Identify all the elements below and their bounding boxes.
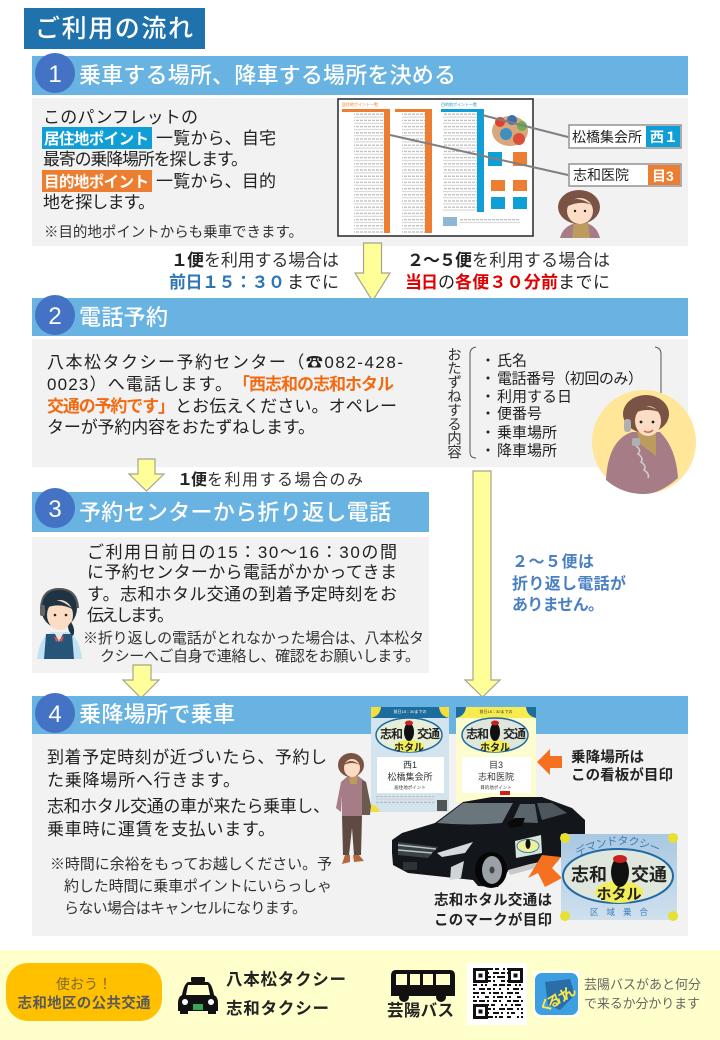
taxi company names: 志和タクシー (226, 999, 329, 1018)
step 4 header bar: 乗降場所で乗車 (79, 702, 235, 727)
step 2 text: ターが予約内容をおたずねします。 (47, 418, 315, 437)
step 1 header bar (32, 53, 688, 95)
bracket (470, 347, 661, 458)
QR code (467, 963, 527, 1025)
label: 松橋集会所 西1: 松橋集会所 (572, 129, 642, 145)
Hotaru Kotsu mark: 志和 (571, 865, 607, 885)
badge: public transport: 使おう！ (56, 976, 112, 992)
label: 志和医院 目3: 志和医院 (573, 167, 629, 183)
badge: public transport (6, 963, 162, 1021)
step 1 text: 一覧から、目的 (156, 172, 276, 191)
step 2 text: 0023）へ電話します。 (47, 375, 232, 394)
sign: 西1: 前日15：30までの (394, 708, 426, 714)
step 1 text (42, 108, 303, 241)
icon: Kuruken app: くるけん (536, 982, 579, 1016)
step 1 text: ※目的地ポイントからも乗車できます。 (44, 224, 303, 241)
Hotaru Kotsu mark: デマンドタクシー (576, 836, 660, 856)
step 1 header bar: 1 (48, 61, 62, 88)
icon: woman on phone (592, 390, 696, 494)
taxi car photo (392, 791, 585, 888)
leader lines (390, 115, 568, 175)
sign: 西1: 交通 (417, 726, 440, 741)
text: 2-5便 condition: の (438, 273, 455, 292)
step 4 text: た乗降場所へ行きます。 (47, 771, 240, 790)
icon: taxi (178, 977, 218, 1014)
step 3 text: に予約センターから電話がかかってきま (87, 563, 397, 582)
text: mark caption: 志和ホタル交通は (434, 891, 552, 909)
sign: 西1 (371, 707, 449, 812)
step 4 text: 志和ホタル交通の車が来たら乗車し、 (47, 797, 330, 816)
sign: 目3: 交通 (503, 726, 526, 741)
text: no callback note: ２～５便は (512, 553, 594, 571)
label: 志和医院 目3: 目3 (652, 168, 674, 184)
bus label: 芸陽バス (387, 1000, 454, 1020)
step 4 header bar (32, 693, 688, 734)
step 2 header bar: 電話予約 (79, 305, 168, 330)
text: no callback note: 折り返し電話が (512, 574, 626, 593)
title: ご利用の流れ (35, 15, 193, 43)
step 1 text: このパンフレットの (43, 108, 198, 127)
arrow: to car mark (528, 855, 562, 887)
text: sign caption: 乗降場所は (571, 749, 644, 766)
sign: 目3: 目的地ポイント (480, 784, 512, 791)
step 2 header bar: 2 (48, 303, 62, 330)
text: no callback note: ありません。 (512, 596, 604, 614)
sign: 西1: 居住地ポイント (394, 784, 426, 791)
step 4 note: らない場合はキャンセルになります。 (64, 900, 307, 917)
Hotaru Kotsu mark: 区 域 乗 合 (590, 907, 648, 917)
label: 松橋集会所 西1: 西１ (650, 129, 678, 145)
text: sign caption (571, 749, 673, 784)
pamphlet thumbnail (338, 99, 533, 236)
asked items list: 乗車場所 (497, 424, 557, 442)
arrow: step 2 to 3 (129, 459, 164, 491)
taxi company names: 八本松タクシー (226, 970, 346, 989)
sign: 西1: 松橋集会所 (387, 771, 433, 782)
icon: operator (37, 588, 82, 659)
step 2 text: 「西志和の志和ホタル (233, 375, 394, 394)
panel: footer (0, 950, 720, 1040)
step 3 header bar: 3 (48, 496, 62, 523)
step 3 header bar: 予約センターから折り返し電話 (79, 500, 391, 525)
icon: woman (558, 190, 600, 238)
step 3 note (83, 630, 424, 665)
step 2 text: とお伝えください。オペレー (175, 397, 397, 416)
text: 2-5便 condition (405, 251, 610, 292)
step 2 header bar (32, 295, 688, 336)
text: 2-5便 condition: を利用する場合は (472, 251, 610, 270)
step 3 text: 伝えします。 (87, 606, 174, 625)
step 1 text: 目的地ポイント (44, 173, 149, 191)
step 3 note: ※折り返しの電話がとれなかった場合は、八本松タ (83, 630, 424, 647)
text: 2-5便 condition: 各便３０分前 (455, 272, 558, 292)
sign: 目3: 志和医院 (478, 771, 514, 782)
text: 2-5便 condition: 当日 (405, 273, 438, 292)
icon: Kuruken app (534, 971, 579, 1017)
sign: 目3: 目3 (489, 760, 503, 770)
sign: 目3: ホタル (480, 742, 510, 754)
sign: 西1: ホタル (394, 742, 424, 754)
step 1 text: 一覧から、自宅 (156, 129, 276, 148)
text: 2-5便 condition: ２～５便 (407, 251, 472, 270)
arrow: step 3 to 4 (123, 665, 159, 698)
icon: standing woman (336, 753, 371, 864)
label: 松橋集会所 西1 (569, 125, 681, 148)
text: 1便 condition: までに (287, 273, 339, 292)
text: 2-5便 condition: までに (558, 273, 610, 292)
sign: 目3: 前日15：30までの (480, 708, 512, 714)
sign: 西1: 西1 (403, 760, 417, 770)
step 4 body background (32, 734, 688, 936)
step 3 text: ご利用日前日の15：30～16：30の間 (87, 543, 397, 562)
step 3 header bar (32, 488, 429, 532)
text: sign caption: この看板が目印 (571, 766, 673, 784)
step 2 text (47, 353, 403, 437)
panel: step 4 (32, 693, 688, 936)
step 4 text (47, 748, 330, 839)
text: Kuruken description: 芸陽バスがあと何分 (584, 977, 701, 992)
text: mark caption: このマークが目印 (434, 911, 552, 929)
step 1 header bar: 乗車する場所、降車する場所を決める (79, 63, 456, 88)
text: no callback note (512, 553, 626, 614)
sign: 目3 (456, 707, 536, 803)
step 4 header bar: 4 (48, 701, 62, 728)
step 4 text: 乗車時に運賃を支払います。 (47, 820, 275, 839)
step 3 note: クシーへご自身で連絡し、確認をお願いします。 (100, 648, 420, 665)
text: 1便 condition: １便 (171, 251, 204, 270)
step 2 text: 交通の予約です」 (47, 397, 175, 416)
arrow: to signs (537, 749, 562, 775)
step 1 text: 居住地ポイント (44, 129, 149, 148)
text: 1便 condition: 前日１５：３０ (169, 273, 285, 292)
text: Kuruken description (584, 977, 701, 1011)
text: 1便 only: を利用する場合のみ (207, 471, 363, 489)
icon: bus (391, 970, 455, 1002)
step 4 note (50, 856, 332, 917)
step 4 note: 約した時間に乗車ポイントにいらっしゃ (64, 878, 332, 895)
panel: step 3 (32, 488, 429, 673)
step 4 text: 到着予定時刻が近づいたら、予約し (47, 748, 327, 767)
panel: step 2 (32, 295, 688, 467)
text: 1便 condition: を利用する場合は (204, 251, 339, 270)
text: Kuruken description: で来るか分かります (584, 996, 700, 1011)
pamphlet thumbnail: 目的地ポイント一覧 (441, 101, 477, 107)
arrow: step 1 to 2 (355, 243, 390, 301)
sign: 西1: 志和 (380, 726, 403, 741)
step 3 text: す。志和ホタル交通の到着予定時刻をお (87, 585, 397, 604)
asked items list: 電話番号（初回のみ） (497, 370, 643, 388)
asked items list (486, 352, 643, 460)
taxi company names (226, 970, 346, 1018)
step 1 text: 地を探します。 (43, 193, 155, 212)
Hotaru Kotsu mark (560, 833, 678, 921)
Hotaru Kotsu mark: 交通 (631, 865, 667, 885)
step 4 note: ※時間に余裕をもってお越しください。予 (50, 856, 332, 873)
asked items list: 降車場所 (497, 442, 557, 460)
asked items list: 氏名 (497, 352, 527, 370)
asked items list: 便番号 (497, 406, 542, 422)
panel: step 1 (32, 53, 688, 246)
badge: public transport: 志和地区の公共交通 (18, 994, 151, 1012)
step 1 text: 最寄の乗降場所を探します。 (43, 150, 248, 169)
step 3 text (87, 543, 397, 625)
pamphlet thumbnail: 居住地ポイント一覧 (342, 101, 378, 107)
text: 1便 condition (169, 251, 339, 292)
text: mark caption (434, 891, 552, 929)
step 3 body background (32, 537, 429, 673)
asked items list: 利用する日 (497, 388, 572, 406)
sign: 目3: 志和 (466, 726, 489, 741)
vertical label: おたずねする内容 (445, 347, 461, 459)
step 2 text: 八本松タクシー予約センター（☎082-428- (47, 353, 403, 372)
text: 1便 only: １便 (177, 471, 207, 489)
title (24, 8, 205, 49)
step 1 body background (32, 98, 688, 246)
step 2 body background (32, 339, 688, 467)
arrow: step 2 to 4 (465, 471, 500, 697)
Hotaru Kotsu mark: ホタル (596, 886, 642, 903)
label: 志和医院 目3 (569, 164, 681, 186)
